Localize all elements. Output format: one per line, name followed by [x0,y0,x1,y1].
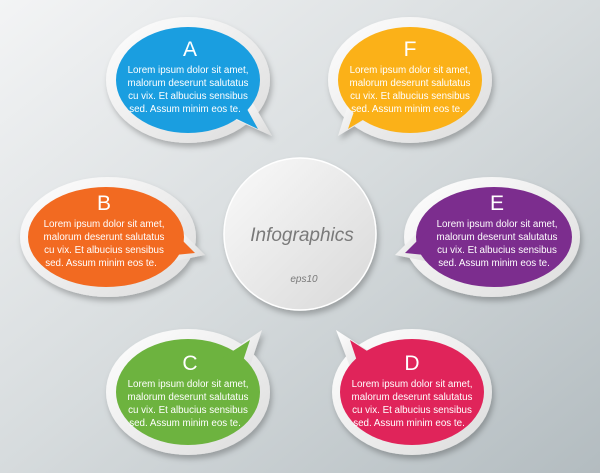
bubble A [106,17,272,143]
text F: Lorem ipsum dolor sit amet, [350,65,470,76]
center circle [224,158,376,310]
letter F: F [404,38,416,61]
bubble F [328,17,492,143]
letter A: A [183,38,197,61]
bubble D [332,329,492,455]
bubble B [20,177,205,297]
text F: malorum deserunt salutatus [350,78,471,89]
letter E: E [490,192,504,215]
text C: malorum deserunt salutatus [128,392,249,403]
text F: sed. Assum minim eos te. [351,104,463,115]
text C: cu vix. Et albucius sensibus [128,405,248,416]
text D: malorum deserunt salutatus [352,392,473,403]
bubble E [395,177,580,297]
title: Infographics [250,225,354,246]
text E: malorum deserunt salutatus [437,232,558,243]
letter D: D [404,352,420,375]
text B: malorum deserunt salutatus [44,232,165,243]
text B: sed. Assum minim eos te. [45,258,157,269]
text E: sed. Assum minim eos te. [438,258,550,269]
subtitle: eps10 [290,274,318,285]
text D: cu vix. Et albucius sensibus [352,405,472,416]
text A: Lorem ipsum dolor sit amet, [128,65,248,76]
text A: cu vix. Et albucius sensibus [128,91,248,102]
text B: Lorem ipsum dolor sit amet, [44,219,164,230]
text A: sed. Assum minim eos te. [129,104,241,115]
bubble C [106,329,270,455]
text D: sed. Assum minim eos te. [353,418,465,429]
text D: Lorem ipsum dolor sit amet, [352,379,472,390]
text A: malorum deserunt salutatus [128,78,249,89]
text B: cu vix. Et albucius sensibus [44,245,164,256]
text C: Lorem ipsum dolor sit amet, [128,379,248,390]
letter B: B [97,192,111,215]
text F: cu vix. Et albucius sensibus [350,91,470,102]
text C: sed. Assum minim eos te. [129,418,241,429]
text E: cu vix. Et albucius sensibus [437,245,557,256]
text E: Lorem ipsum dolor sit amet, [437,219,557,230]
letter C: C [182,352,198,375]
